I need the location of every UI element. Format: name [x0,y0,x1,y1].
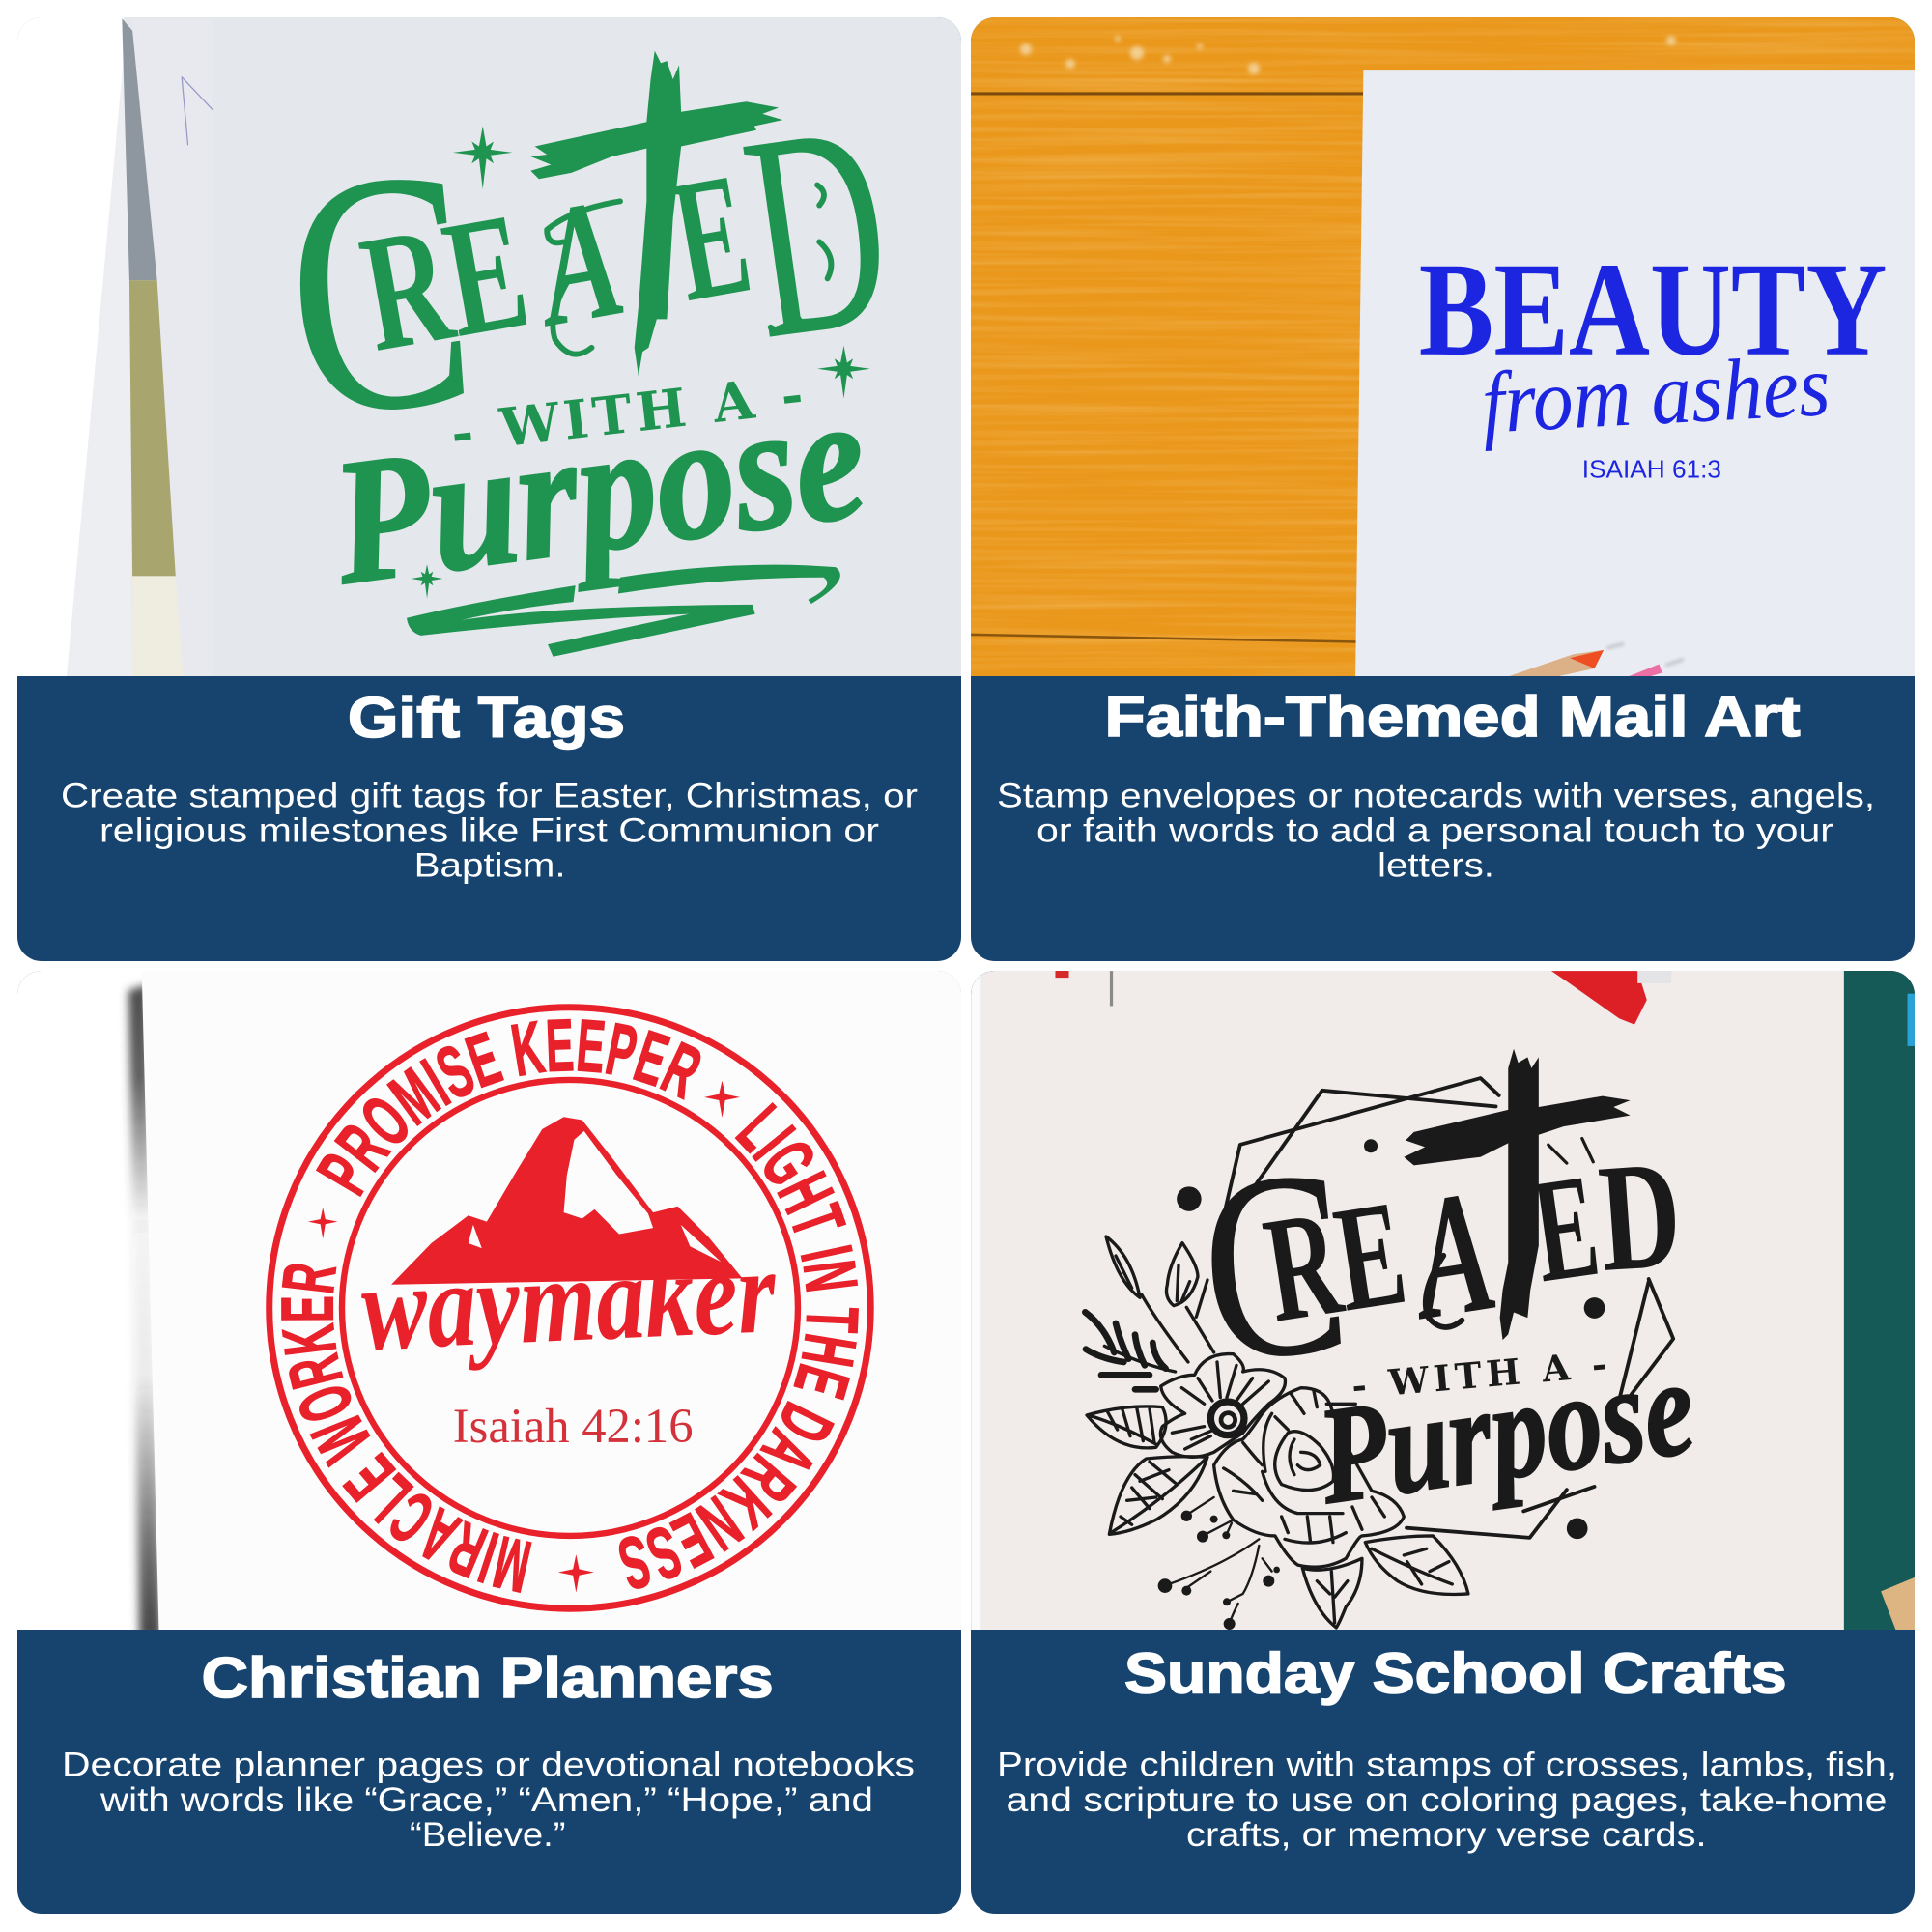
stamp word: created: E [661,136,763,339]
stamp reference: isaiah 42:16: Isaiah 42:16 [453,1400,694,1454]
stamp word: created: A [1394,1152,1507,1357]
text: planners description: with words like “Grace,” “Amen,” “Hope,” and [99,1781,873,1819]
stamp word: purpose: Purpose [1309,1329,1703,1534]
stamp words: with a: - WITH A - [448,363,807,465]
stamp word: created: C [273,97,487,489]
text: gift tags description: religious milestones like First Communion or [99,811,879,850]
panel: faith-themed mail art [971,17,1927,961]
photo: red round stamp on page [17,971,961,1630]
heading: sunday school crafts: Sunday School Crafts [1124,1642,1787,1706]
text: mail art description: or faith words to add a personal touch to your [1037,811,1833,850]
stamp word: created [273,61,906,489]
rose [1214,1388,1404,1567]
fern and stems [1085,1280,1214,1389]
flower 1 [1160,1354,1285,1457]
icon: ring stars [308,1081,740,1593]
text: mail art description: Stamp envelopes or notecards with verses, angels, [997,777,1875,815]
text: gift tags description: Create stamped gift tags for Easter, Christmas, or [61,777,918,815]
stamp word: created: RE [1255,1168,1415,1354]
stamp word: created: C [1191,1114,1358,1418]
icon: brush cross [1404,1049,1631,1340]
photo: blue stamp on paper over wood [971,17,1927,678]
text: sunday school description: crafts, or memory verse cards. [1186,1816,1707,1854]
panel: christian planners [17,971,961,1914]
text: planners description: Decorate planner pages or devotional notebooks [62,1747,915,1784]
photo: green stamp on card [17,17,961,676]
paper sheet [1355,70,1927,678]
buds [1106,1236,1140,1297]
icon: coloured pencils [1508,644,1684,676]
leaf left [1087,1406,1166,1448]
panel: sunday school crafts [971,966,1927,1914]
text: sunday school description [997,1747,1897,1854]
frame dots [1177,1139,1605,1539]
heading: gift tags: Gift Tags [348,686,625,750]
leaf bottom [1302,1558,1362,1628]
stamp: created with a purpose, black floral [1177,1049,1703,1539]
icon: sparkle stars [412,126,870,599]
text: gift tags description [61,777,918,885]
swash underline [407,565,840,657]
icon: brush cross [530,51,782,376]
text: gift tags description: Baptism. [414,846,566,885]
heading: christian planners: Christian Planners [202,1646,774,1710]
badge ring text: MIRACLE WORKER [281,1264,532,1594]
text: sunday school description: Provide children with stamps of crosses, lambs, fish, [997,1747,1897,1784]
text: planners description [62,1747,915,1854]
leaf lower [1109,1457,1208,1534]
stamp: created with a purpose, green [273,51,906,657]
icon: mountain [391,1117,743,1285]
text: mail art description [997,777,1875,885]
leaf right bottom [1365,1536,1468,1595]
text: mail art description: letters. [1378,846,1494,885]
text: planners description: “Believe.” [410,1816,566,1854]
stamp reference: isaiah 61:3: ISAIAH 61:3 [1582,454,1721,483]
stamp: beauty from ashes: from ashes [1480,336,1833,452]
geometric frame [1222,1078,1673,1538]
stamp word: waymaker: waymaker [359,1225,780,1377]
badge rings [270,1008,870,1608]
badge ring text: LIGHT IN THE DARKNESS [618,1102,859,1589]
stamp word: created: D [728,61,906,401]
stamp word: created: RE [350,178,540,387]
stamp words: with a: - WITH A - [1350,1343,1608,1407]
badge ring text: PROMISE KEEPER [315,1018,701,1198]
stamp: beauty from ashes [1420,266,1886,478]
stamp word: created [1191,1114,1686,1418]
icon: floral bouquet [1085,1236,1468,1630]
stamp: waymaker circular badge [266,1004,874,1612]
heading: faith-themed mail art: Faith-Themed Mail Art [1105,685,1801,749]
stamp word: created: D [1594,1129,1686,1304]
berries [1158,1511,1280,1630]
stamp word: created: A [518,162,636,363]
stamp word: created: E [1524,1144,1607,1314]
stamp word: purpose: Purpose [322,356,876,623]
text: sunday school description: and scripture to use on coloring pages, take-home [1007,1781,1888,1819]
badge ring text [281,1018,859,1594]
panel: gift tags [17,17,961,961]
photo: black floral stamp on paper [971,966,1927,1632]
icon: desk items [1055,969,1927,1632]
letter flourishes [547,185,831,355]
berry branches [1169,1497,1272,1623]
